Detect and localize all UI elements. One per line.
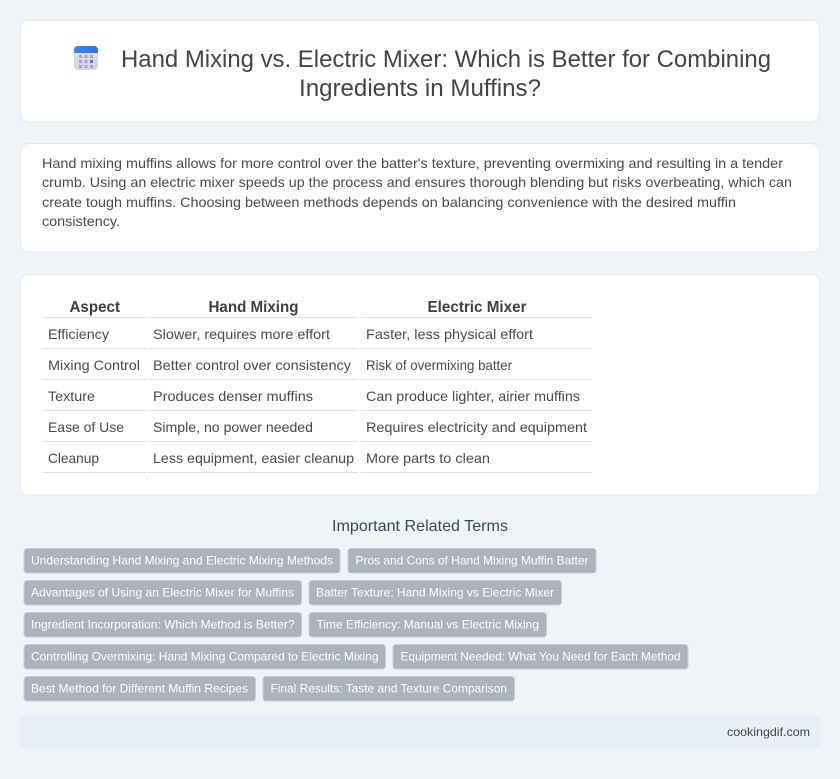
table row: texture: Produces denser muffins	[153, 388, 313, 404]
tag	[348, 548, 596, 573]
table row: cleanup	[48, 450, 490, 466]
icon: calendar	[74, 46, 98, 70]
tag	[24, 580, 302, 605]
tag: Time Efficiency: Manual vs Electric Mixing	[316, 618, 539, 632]
table row: mixing control: Mixing Control	[48, 357, 140, 373]
heading: important related terms: Important Related Terms	[332, 518, 508, 535]
tag	[24, 548, 340, 573]
table row: texture	[48, 388, 580, 404]
tag: Pros and Cons of Hand Mixing Muffin Batter	[356, 554, 588, 568]
table header row	[70, 299, 526, 316]
tag: Understanding Hand Mixing and Electric Mixing Methods	[31, 554, 333, 568]
tag	[24, 612, 302, 637]
table row: mixing control: Better control over consistency	[153, 357, 351, 373]
text block: summary: create tough muffins. Choosing between methods depends on balancing convenience with the desired muffin	[42, 194, 736, 210]
tag	[24, 644, 386, 669]
table row: ease of use: Ease of Use	[48, 419, 124, 435]
tag	[309, 580, 562, 605]
table row: cleanup: Less equipment, easier cleanup	[153, 450, 354, 466]
tag	[309, 612, 546, 637]
text block: summary: crumb. Using an electric mixer speeds up the process and ensures thorough blending but risks overbeating, which can	[42, 174, 792, 190]
table row: ease of use	[48, 419, 587, 435]
table row: cleanup: More parts to clean	[366, 450, 490, 466]
tag: Best Method for Different Muffin Recipes	[31, 682, 248, 696]
table row: texture: Can produce lighter, airier muffins	[366, 388, 580, 404]
table row: efficiency	[48, 326, 533, 342]
tag: Ingredient Incorporation: Which Method is Better?	[31, 618, 295, 632]
footer	[20, 715, 820, 749]
table row: mixing control: Risk of overmixing batter	[366, 357, 512, 373]
table row: efficiency: Efficiency	[48, 326, 109, 342]
table header row: Electric Mixer	[428, 299, 526, 316]
tag: Batter Texture: Hand Mixing vs Electric Mixer	[316, 586, 554, 600]
title: Hand Mixing vs. Electric Mixer: Which is Better for Combining	[121, 46, 771, 73]
title: Ingredients in Muffins?	[299, 75, 541, 102]
table row: efficiency: Faster, less physical effort	[366, 326, 533, 342]
tag	[393, 644, 688, 669]
tag	[24, 676, 256, 701]
tag	[263, 676, 514, 701]
text block: summary: consistency.	[42, 213, 120, 229]
tag: Final Results: Taste and Texture Comparison	[270, 682, 507, 696]
text block: summary: Hand mixing muffins allows for more control over the batter's texture, preventing overmixing and resulting in a tender	[42, 155, 783, 171]
table row: ease of use: Simple, no power needed	[153, 419, 313, 435]
table header row: Aspect	[70, 299, 121, 316]
tag: Controlling Overmixing: Hand Mixing Compared to Electric Mixing	[31, 650, 378, 664]
tag: Equipment Needed: What You Need for Each Method	[400, 650, 680, 664]
table row: mixing control	[48, 357, 512, 373]
title	[121, 46, 771, 102]
panel: summary paragraph	[20, 144, 820, 252]
text block: summary	[42, 155, 792, 229]
tag: Advantages of Using an Electric Mixer for Muffins	[31, 586, 294, 600]
table header row: Hand Mixing	[208, 299, 298, 316]
table row: efficiency: Slower, requires more effort	[153, 326, 330, 342]
panel: comparison table	[20, 274, 820, 495]
table row: cleanup: Cleanup	[48, 450, 99, 466]
panel: header	[20, 20, 820, 122]
tag group: related terms	[24, 548, 688, 701]
footer source: cookingdif.com	[727, 725, 810, 739]
table row: texture: Texture	[48, 388, 95, 404]
table row: ease of use: Requires electricity and equipment	[366, 419, 587, 435]
